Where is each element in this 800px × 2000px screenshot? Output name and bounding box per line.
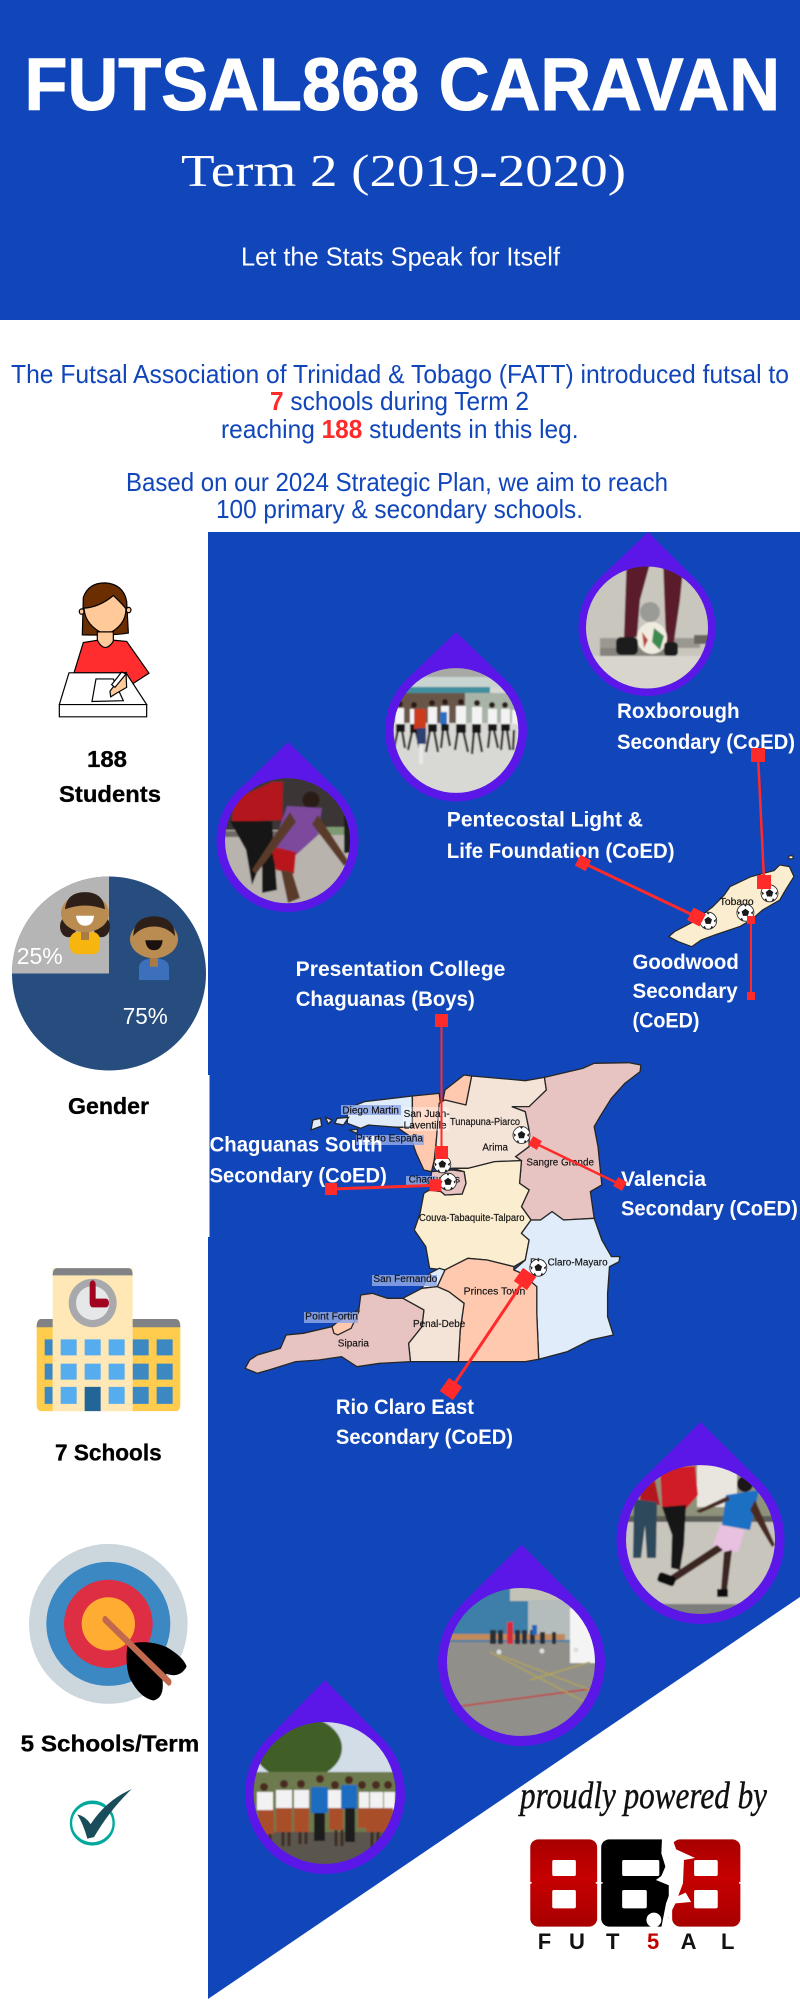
school name labels: Chaguanas (Boys) — [296, 988, 475, 1011]
label: 75%: 75% — [123, 1003, 168, 1029]
intro text block — [11, 359, 789, 524]
map of Tobago — [669, 856, 794, 947]
map place-name labels: Couva-Tabaquite-Talparo — [419, 1213, 525, 1224]
icon: student at desk — [59, 583, 149, 717]
stat: schools — [37, 1268, 180, 1466]
icon: boy — [130, 916, 178, 980]
map place-name labels: Sangre Grande — [526, 1158, 594, 1169]
school name labels: Secondary — [632, 980, 738, 1003]
connector: Roxborough — [751, 748, 771, 889]
soccer ball markers — [434, 885, 778, 1276]
map place-name labels: Diego Martin — [342, 1105, 399, 1116]
chart: gender pie — [12, 876, 206, 1070]
tagline: Let the Stats Speak for Itself — [241, 242, 561, 272]
photo drop: group photo — [245, 1680, 405, 1874]
intro text block: 100 primary & secondary schools. — [216, 494, 583, 524]
school name labels: Valencia — [621, 1168, 706, 1191]
school name labels: Roxborough — [617, 700, 740, 723]
map place-name labels: Siparia — [338, 1339, 369, 1350]
connector: Pentecostal — [575, 855, 706, 926]
map place-name labels — [304, 897, 754, 1350]
logo: 868 futsal — [529, 1838, 742, 1954]
map place-name labels: Puerto España — [356, 1134, 423, 1145]
map place-name labels: Tunapuna-Piarco — [450, 1117, 520, 1128]
intro text block: Based on our 2024 Strategic Plan, we aim to reach — [126, 467, 668, 497]
intro text block: reaching 188 students in this leg. — [221, 414, 578, 444]
school name labels: Life Foundation (CoED) — [447, 840, 674, 863]
map place-name labels: Laventille — [404, 1120, 447, 1132]
icon: target with arrow — [29, 1544, 188, 1704]
photo drop: girl playing — [216, 742, 358, 912]
school name labels: Secondary (CoED) — [210, 1165, 387, 1188]
map place-name labels: Tobago — [720, 897, 754, 908]
icon: school building — [37, 1268, 180, 1411]
icon: girl — [60, 892, 110, 954]
title: FUTSAL868 CARAVAN — [24, 43, 780, 126]
photo drop: kicking the ball — [616, 1422, 785, 1624]
intro text block: 7 schools during Term 2 — [270, 386, 529, 416]
photo drop: indoor court — [438, 1544, 605, 1746]
label: Students: Students — [59, 781, 161, 807]
map place-name labels: Rio Claro-Mayaro — [530, 1258, 608, 1269]
map place-name labels: Princes Town — [464, 1287, 525, 1298]
school name labels: Goodwood — [632, 951, 739, 974]
red connector lines — [325, 748, 771, 1400]
map place-name labels: San Juan- — [404, 1109, 450, 1120]
school name labels: Chaguanas South — [210, 1134, 382, 1157]
map place-name labels: Penal-Debe — [413, 1319, 466, 1330]
header band — [0, 0, 800, 320]
school name labels: Secondary (CoED) — [621, 1198, 798, 1221]
label: 25%: 25% — [17, 943, 63, 969]
logo wordmark: FUT 5 AL — [538, 1929, 734, 1954]
icon: check mark — [71, 1789, 132, 1844]
school name labels — [210, 700, 798, 1449]
connector: Goodwood — [747, 916, 755, 1000]
school name labels: Pentecostal Light & — [447, 809, 643, 832]
subtitle: Term 2 (2019-2020) — [181, 145, 626, 196]
connector: Chaguanas South — [325, 1179, 441, 1195]
label: 7 Schools: 7 Schools — [55, 1440, 162, 1466]
school name labels: Secondary (CoED) — [336, 1426, 513, 1449]
school name labels: (CoED) — [632, 1010, 699, 1033]
stat: target — [21, 1544, 199, 1756]
connector: Valencia — [528, 1136, 627, 1191]
label: 188: 188 — [87, 746, 127, 772]
map place-name labels: Arima — [482, 1143, 508, 1154]
photo drop: Pentecostal students — [385, 632, 527, 802]
map place-name labels: Chaguanas — [409, 1175, 460, 1186]
connector: Rio Claro East — [440, 1268, 536, 1400]
photo drop: Roxborough — [578, 532, 716, 696]
school name labels: Rio Claro East — [336, 1396, 474, 1419]
label: Gender: Gender — [68, 1093, 149, 1119]
map place-name labels: Point Fortin — [305, 1311, 358, 1322]
label: 5 Schools/Term: 5 Schools/Term — [21, 1730, 199, 1756]
stat: students — [59, 583, 161, 807]
school name labels: Secondary (CoED) — [617, 731, 795, 754]
connector: Presentation College — [435, 1014, 448, 1159]
blue diagonal panel — [208, 532, 800, 1999]
school name labels: Presentation College — [296, 958, 505, 981]
map place-name labels: San Fernando — [373, 1274, 438, 1285]
map of Trinidad — [245, 856, 794, 1373]
